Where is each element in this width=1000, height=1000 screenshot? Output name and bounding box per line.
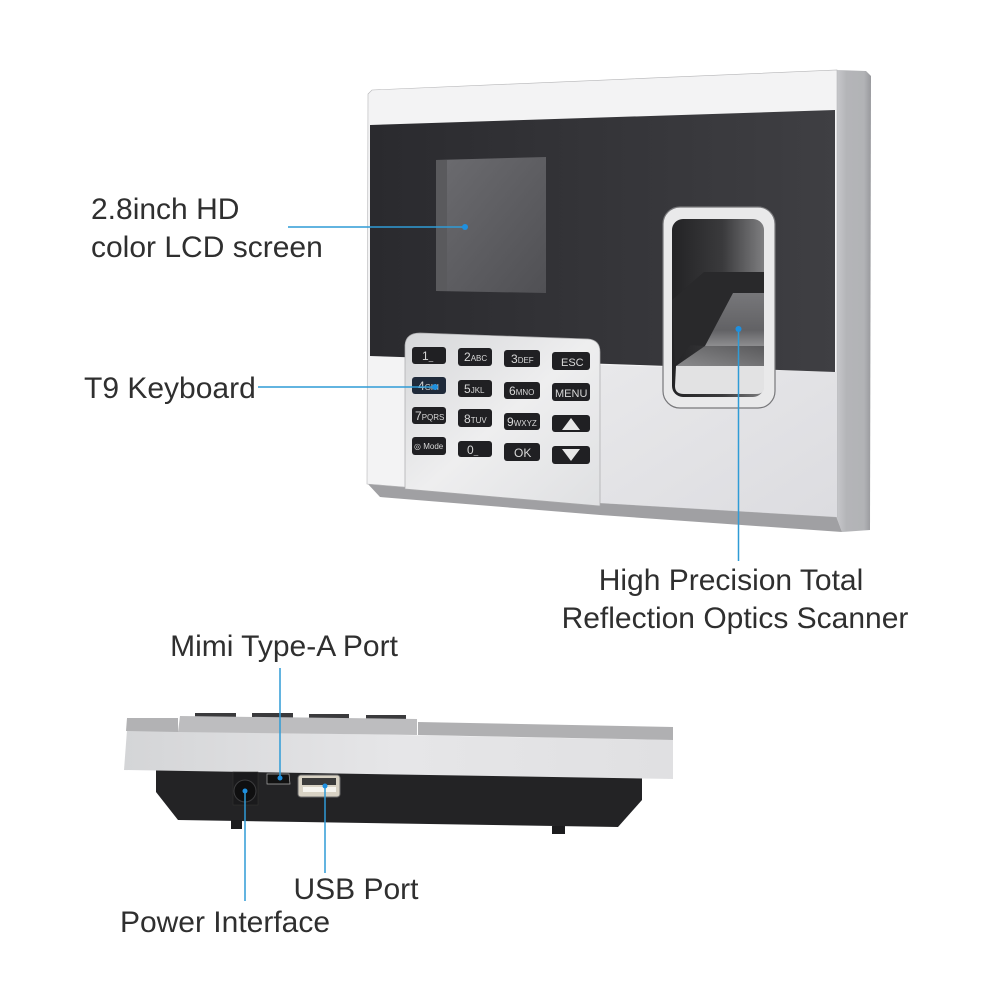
label: USB Port <box>293 873 419 906</box>
rubber foot right <box>552 826 565 834</box>
key 8: 8TUV <box>464 412 487 426</box>
scanner well <box>672 219 764 397</box>
key 9: 9WXYZ <box>507 415 537 429</box>
key down <box>552 446 590 464</box>
label: 2.8inch HD <box>91 193 239 226</box>
callout: power <box>120 788 330 939</box>
lower silver panel <box>600 365 837 517</box>
leader line <box>258 384 438 390</box>
key 0: 0_ <box>467 443 479 457</box>
black fascia <box>370 110 835 372</box>
side edge <box>836 70 871 532</box>
label: T9 Keyboard <box>84 372 256 405</box>
callout: scanner <box>562 326 908 635</box>
key 5: 5JKL <box>464 382 485 396</box>
leader line <box>736 326 742 561</box>
key MENU: MENU <box>555 388 587 400</box>
fingerprint scanner <box>663 207 775 408</box>
callout: mini port <box>170 630 399 780</box>
label: Mimi Type-A Port <box>170 630 399 663</box>
scanner lip <box>675 366 764 394</box>
leader line <box>242 788 248 901</box>
sensor glass <box>705 293 764 346</box>
key 9 <box>504 413 540 430</box>
key 8 <box>458 409 492 427</box>
label line 2: Reflection Optics Scanner <box>562 602 908 635</box>
key 7: 7PQRS <box>415 409 444 423</box>
key 1 <box>412 347 446 364</box>
keypad plate <box>405 333 600 506</box>
key 0 <box>458 441 492 457</box>
lower slope <box>676 346 764 366</box>
key mode <box>412 437 446 455</box>
leader line <box>278 668 282 780</box>
grey top strip right <box>418 722 673 740</box>
key 3: 3DEF <box>511 352 534 366</box>
grey top strip left <box>126 718 178 732</box>
leader line <box>288 224 468 230</box>
callout: LCD screen <box>91 193 468 264</box>
power jack <box>233 772 258 805</box>
key 5 <box>458 380 492 397</box>
key 1: 1_ <box>422 349 434 363</box>
key 3 <box>504 350 540 367</box>
front face <box>367 70 837 517</box>
screen glass <box>436 157 546 293</box>
key MENU <box>552 383 590 401</box>
key OK: OK <box>514 446 531 460</box>
leader line <box>322 784 328 873</box>
keypad panel <box>405 333 600 506</box>
light housing band <box>124 730 673 779</box>
key 6: 6MNO <box>509 384 534 398</box>
top buttons <box>195 713 406 720</box>
LCD screen <box>436 157 546 293</box>
key 6 <box>504 382 540 399</box>
device side view <box>124 713 673 834</box>
callout: keyboard <box>84 372 438 405</box>
key 4 <box>412 377 446 394</box>
screen edge strip <box>436 160 447 291</box>
key ESC: ESC <box>561 357 584 369</box>
key ESC <box>552 352 590 370</box>
bottom bevel <box>367 483 842 532</box>
key 4: 4GHI <box>418 379 439 393</box>
device front view <box>367 70 871 532</box>
scanner bezel <box>663 207 775 408</box>
mini USB port <box>267 774 290 784</box>
black rear housing <box>156 768 642 827</box>
rubber foot left <box>231 820 242 829</box>
label: Power Interface <box>120 906 330 939</box>
grey top strip middle <box>178 716 417 735</box>
key OK <box>504 443 540 461</box>
callout: USB port <box>293 784 419 906</box>
key 2: 2ABC <box>464 350 487 364</box>
dark sensor ledge <box>672 272 764 365</box>
USB port <box>298 775 340 797</box>
key mode: ◎ Mode <box>414 442 444 451</box>
key up <box>552 415 590 432</box>
label line 2: color LCD screen <box>91 231 323 264</box>
label: High Precision Total <box>599 564 863 597</box>
key 2 <box>458 348 492 366</box>
